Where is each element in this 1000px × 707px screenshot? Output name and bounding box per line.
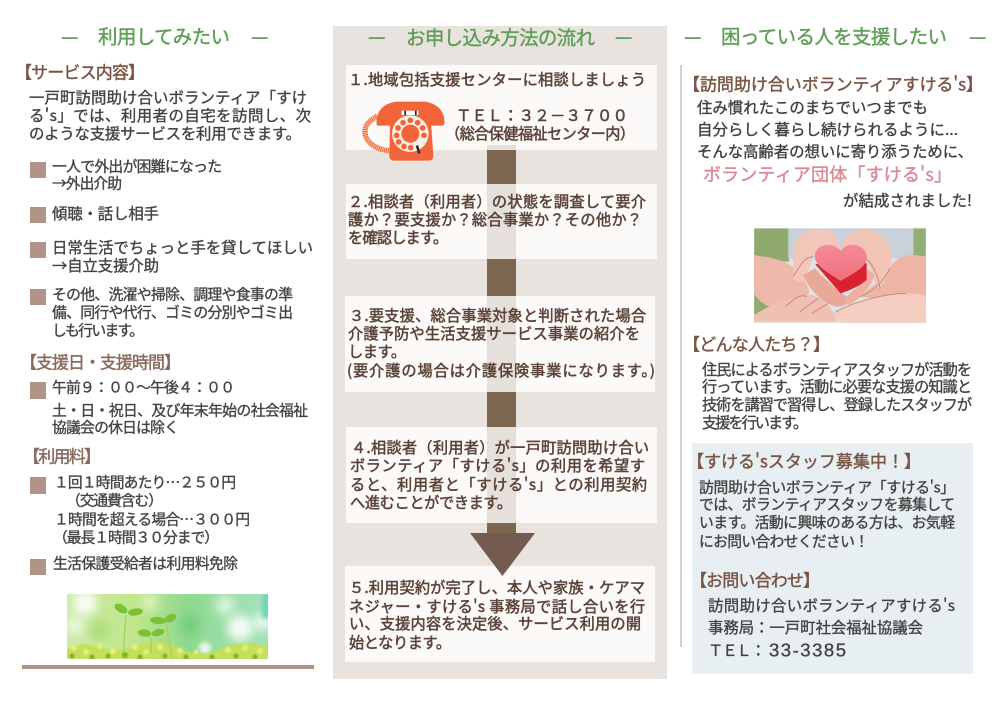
list item: hourly fee: １時間を超える場合…３００円 bbox=[54, 509, 250, 530]
step 5: contract and start bbox=[345, 566, 655, 662]
list item: going out: 一人で外出が困難になった bbox=[52, 156, 222, 177]
text block: mission: が結成されました! bbox=[843, 189, 972, 211]
text block: mission bbox=[697, 96, 973, 211]
step 4: apply for the volunteers: へ進むことができます。 bbox=[350, 491, 512, 513]
text block: recruitment bbox=[699, 477, 955, 552]
list item: other support bbox=[30, 284, 293, 341]
list item: going out bbox=[30, 156, 222, 194]
text block: recruitment: 訪問助け合いボランティア「すける's」 bbox=[699, 477, 955, 498]
text block: contact details: ＴＥＬ： bbox=[708, 639, 766, 661]
step 1: contact the support center bbox=[346, 65, 657, 150]
step 3: introduce services bbox=[345, 296, 655, 392]
list item: other support: しも行います。 bbox=[52, 320, 144, 341]
step 3: introduce services: ３.要支援、総合事業対象と判断された場合 bbox=[349, 304, 646, 326]
list item: hours bbox=[30, 377, 308, 438]
list item: listening: 傾聴・話し相手 bbox=[52, 202, 159, 224]
subheading: 訪問助け合いボランティアすける's: 【訪問助け合いボランティアすける's】 bbox=[683, 71, 983, 96]
heading: 利用してみたい: 利用してみたい bbox=[98, 21, 230, 50]
list item: hourly fee: （最長１時間３０分まで） bbox=[53, 527, 219, 548]
subheading: お問い合わせ: 【お問い合わせ】 bbox=[690, 567, 820, 592]
panel: staff recruitment and contact bbox=[687, 443, 973, 674]
step 3: introduce services: (要介護の場合は介護保険事業になります。) bbox=[347, 359, 655, 381]
text block: contact details: 訪問助け合いボランティアすける's bbox=[708, 594, 955, 616]
text block: recruitment: では、ボランティアスタッフを募集して bbox=[699, 494, 955, 515]
text block: who they are: 技術を講習で習得し、登録したスタッフが bbox=[702, 393, 972, 415]
step 5: contract and start: ネジャー・すける's 事務局で話し合いを行 bbox=[349, 595, 645, 617]
subheading: どんな人たち？: 【どんな人たち？】 bbox=[683, 331, 830, 356]
list item: hourly fee: （交通費含む） bbox=[66, 490, 163, 511]
text block: mission: 住み慣れたこのまちでいつまでも bbox=[697, 96, 928, 118]
bottom rule bbox=[22, 665, 314, 669]
vertical side rule bbox=[680, 65, 682, 647]
panel: middle column, application flow bbox=[333, 21, 667, 679]
list item: hourly fee: １回１時間あたり…２５０円 bbox=[54, 472, 236, 493]
text block: who they are bbox=[702, 358, 972, 433]
subheading: スタッフ募集中: 【すける'sスタッフ募集中！】 bbox=[687, 448, 921, 473]
phone number: ＴＥＬ：３２－３７００ bbox=[456, 104, 628, 126]
heading: 困っている人を支援したい: — bbox=[684, 21, 701, 50]
list item: other support: 備、同行や代行、ゴミの分別やゴミ出 bbox=[52, 302, 293, 323]
phone number bbox=[445, 104, 635, 144]
heading: お申し込み方法の流れ: お申し込み方法の流れ bbox=[406, 22, 595, 51]
text block: recruitment: にお問い合わせください！ bbox=[699, 531, 869, 552]
step 4: apply for the volunteers: ４.相談者（利用者）が一戸町訪問助け合い bbox=[351, 436, 649, 458]
step 2: assess condition: ２.相談者（利用者）の状態を調査して要介 bbox=[348, 190, 646, 212]
text block: contact details bbox=[708, 594, 955, 661]
heading: 困っている人を支援したい: 困っている人を支援したい bbox=[721, 21, 947, 50]
step 5: contract and start: ５.利用契約が完了し、本人や家族・ケアマ bbox=[349, 576, 645, 598]
panel: right column, volunteers bbox=[680, 21, 986, 674]
step 2: assess condition: 護か？要支援か？総合事業か？その他か？ bbox=[348, 208, 642, 230]
step 2: assess condition bbox=[346, 184, 657, 259]
list item: hours: 協議会の休日は除く bbox=[52, 417, 179, 438]
step 4: apply for the volunteers bbox=[346, 427, 657, 523]
step 3: introduce services: 介護予防や生活支援サービス事業の紹介を bbox=[348, 322, 640, 344]
heading: 利用してみたい: — bbox=[251, 21, 268, 50]
step 2: assess condition: を確認します。 bbox=[348, 226, 448, 248]
heading: 利用してみたい: — bbox=[61, 21, 78, 50]
section: support days and hours bbox=[20, 349, 308, 438]
phone number: （総合保健福祉センター内） bbox=[445, 122, 635, 144]
text block: mission: 自分らしく暮らし続けられるように... bbox=[697, 118, 958, 140]
text block: who they are: 支援を行います。 bbox=[702, 411, 808, 433]
step 5: contract and start: 始となります。 bbox=[349, 631, 451, 653]
text block: contact details: 事務局：一戸町社会福祉協議会 bbox=[708, 616, 923, 638]
image: hands holding a red heart bbox=[754, 228, 926, 323]
section: fees bbox=[23, 443, 250, 575]
arrow shaft bbox=[487, 145, 516, 535]
text block: service intro bbox=[29, 86, 311, 144]
text block: service intro: 一戸町訪問助け合いボランティア「すけ bbox=[29, 86, 307, 108]
list item: hourly fee bbox=[30, 472, 250, 548]
heading: お申し込み方法の流れ: — bbox=[368, 21, 385, 50]
heading: 利用してみたい bbox=[61, 21, 268, 50]
subheading: 利用料: 【利用料】 bbox=[23, 443, 101, 468]
text block: who they are: 住民によるボランティアスタッフが活動を bbox=[702, 358, 972, 380]
list item: daily life help: →自立支援介助 bbox=[52, 254, 159, 276]
step 4: apply for the volunteers: ボランティア「すける's」の利用を希望す bbox=[350, 454, 645, 476]
list item: fee exemption: 生活保護受給者は利用料免除 bbox=[53, 553, 238, 574]
subheading: サービス内容: 【サービス内容】 bbox=[15, 59, 145, 84]
list item: hours: 土・日・祝日、及び年末年始の社会福祉 bbox=[52, 400, 308, 421]
subheading: 支援日・支援時間: 【支援日・支援時間】 bbox=[20, 349, 181, 374]
heading: お申し込み方法の流れ bbox=[368, 21, 632, 51]
text block: service intro: のような支援サービスを利用できます。 bbox=[29, 122, 301, 144]
heading: 困っている人を支援したい: — bbox=[969, 21, 986, 50]
heading: お申し込み方法の流れ: — bbox=[615, 21, 632, 50]
section: service details bbox=[15, 59, 313, 341]
list item: going out: →外出介助 bbox=[52, 173, 122, 194]
text block: contact details: 33-3385 bbox=[769, 640, 846, 661]
list item: daily life help bbox=[30, 236, 313, 276]
text block: who they are: 行っています。活動に必要な支援の知識と bbox=[702, 375, 972, 397]
text block: mission: ボランティア団体「すける's」 bbox=[703, 161, 952, 187]
step 5: contract and start: い、支援内容を決定後、サービス利用の開 bbox=[349, 612, 641, 634]
list item: hours: 午前９：００～午後４：００ bbox=[52, 377, 235, 398]
image: green sprouts bbox=[66, 591, 270, 660]
text block: service intro: る's」では、利用者の自宅を訪問し、次 bbox=[29, 104, 311, 126]
step 1: contact the support center: １.地域包括支援センターに相談しましょう bbox=[348, 68, 646, 90]
arrow head bbox=[470, 533, 535, 576]
step 3: introduce services: します。 bbox=[348, 340, 406, 362]
list item: daily life help: 日常生活でちょっと手を貸してほしい bbox=[52, 236, 313, 258]
icon: orange rotary telephone bbox=[365, 102, 444, 161]
text block: mission: そんな高齢者の想いに寄り添うために、 bbox=[697, 140, 973, 162]
list item: other support: その他、洗濯や掃除、調理や食事の準 bbox=[52, 284, 293, 305]
text block: recruitment: います。活動に興味のある方は、お気軽 bbox=[699, 512, 955, 533]
panel: left column, using the service bbox=[15, 21, 314, 669]
step 4: apply for the volunteers: ると、利用者と「すける's」との利用契約 bbox=[350, 473, 647, 495]
panel background bbox=[333, 26, 667, 679]
